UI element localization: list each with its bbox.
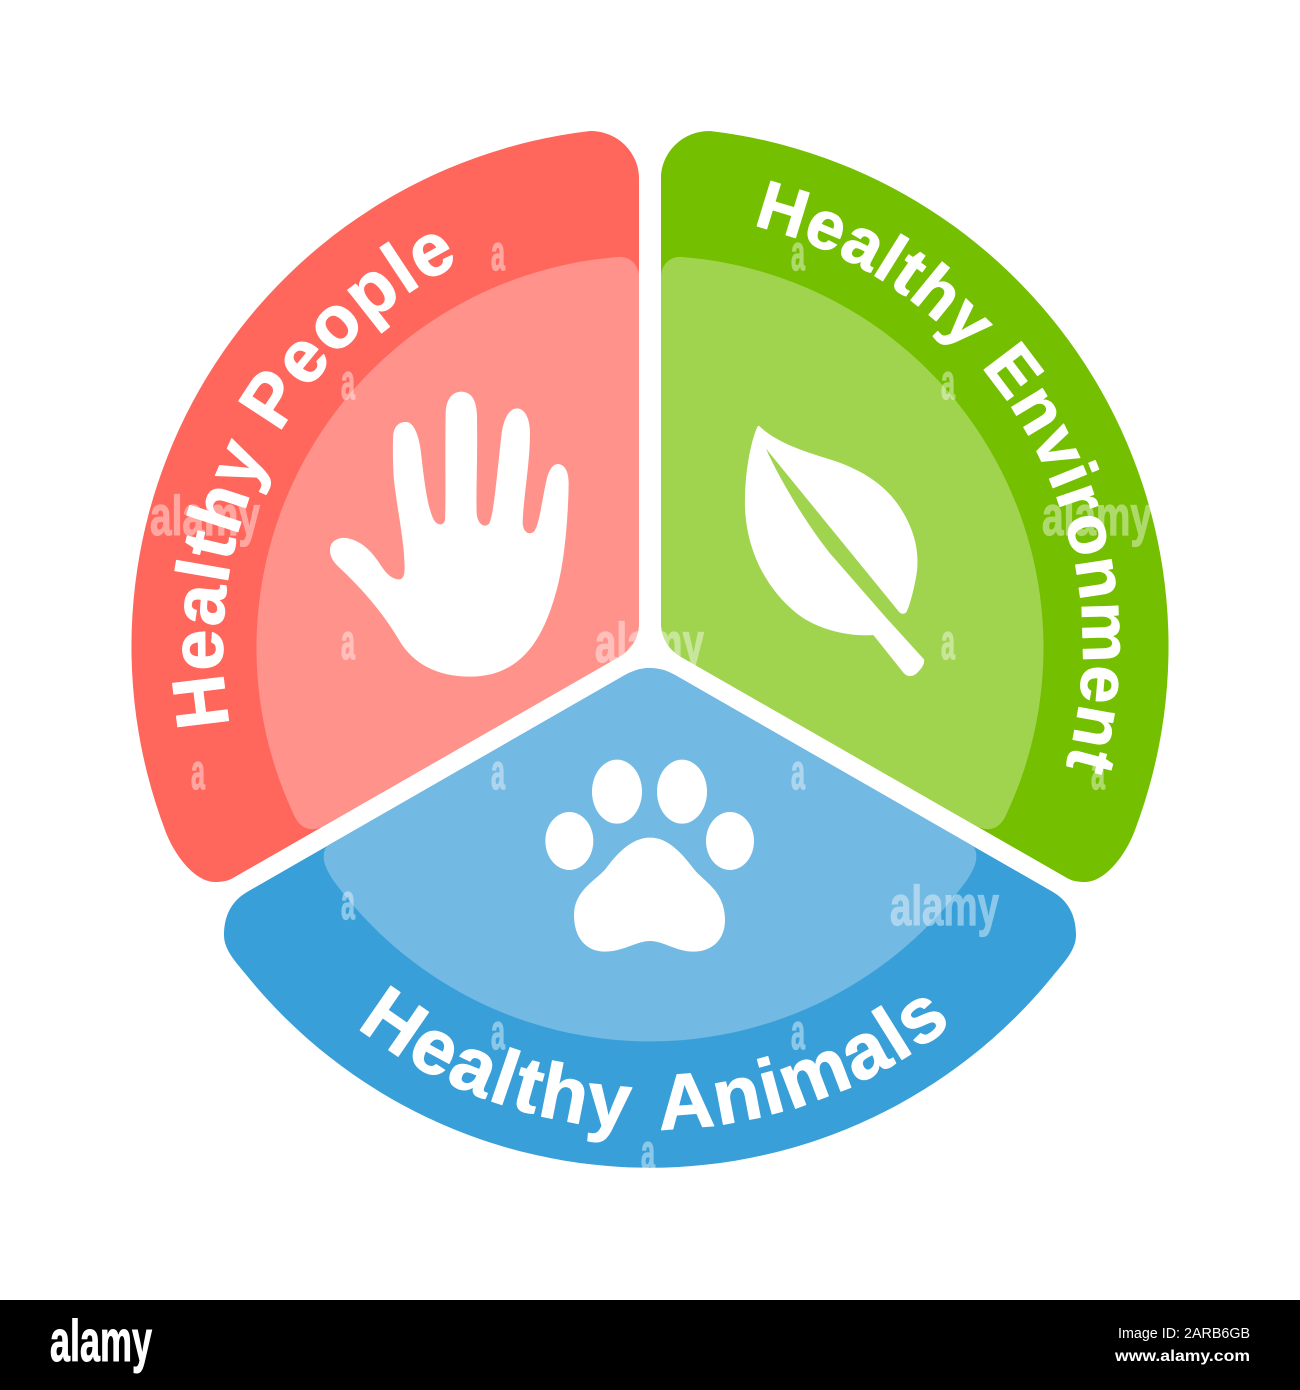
watermark: alamy stamps: a: [941, 614, 956, 670]
watermark: alamy stamps: a: [341, 874, 356, 930]
green outer segment: [661, 131, 1169, 882]
watermark: alamy stamps: a: [941, 354, 956, 410]
heading: healthy people: Healthy People: [172, 234, 453, 728]
watermark: alamy stamps: a: [791, 225, 806, 281]
icon: paw: [545, 760, 754, 952]
heading: healthy animals: Healthy Animals: [360, 985, 946, 1142]
blue inner segment: [324, 668, 976, 1041]
footer bar: [0, 1300, 1300, 1390]
watermark: alamy stamps: a: [341, 354, 356, 410]
panel: healthy animals: [224, 668, 1076, 1168]
heading: healthy environment: Healthy Environment: [756, 180, 1120, 775]
icon: hand: [330, 392, 569, 677]
watermark: alamy stamps: a: [491, 1004, 506, 1060]
watermark: alamy stamps: a: [491, 744, 506, 800]
blue outer segment: [224, 668, 1076, 1168]
red outer segment: [131, 131, 639, 882]
icon: leaf: [745, 426, 924, 676]
red inner segment: [256, 257, 639, 829]
watermark: alamy stamps: a: [341, 614, 356, 670]
watermark: alamy stamps: a: [791, 1004, 806, 1060]
watermark: alamy stamps: a: [491, 225, 506, 281]
watermark: alamy stamps: alamy: [890, 874, 999, 937]
watermark: alamy stamps: alamy: [1042, 484, 1152, 547]
footer: website: www.alamy.com: [1114, 1348, 1250, 1365]
watermark: alamy stamps: alamy: [595, 611, 704, 674]
watermark: alamy stamps: a: [1091, 744, 1106, 800]
panel: healthy people: [131, 131, 639, 882]
watermark: alamy stamps: [150, 225, 1152, 1180]
watermark: alamy stamps: a: [641, 1124, 656, 1180]
green inner segment: [661, 257, 1044, 829]
panel: healthy environment: [660, 131, 1169, 882]
footer logo: alamy: alamy: [50, 1309, 152, 1374]
watermark: alamy stamps: a: [191, 744, 206, 800]
watermark: alamy stamps: alamy: [150, 484, 260, 547]
footer: image id: Image ID: 2ARB6GB: [1118, 1325, 1250, 1342]
watermark: alamy stamps: a: [791, 744, 806, 800]
